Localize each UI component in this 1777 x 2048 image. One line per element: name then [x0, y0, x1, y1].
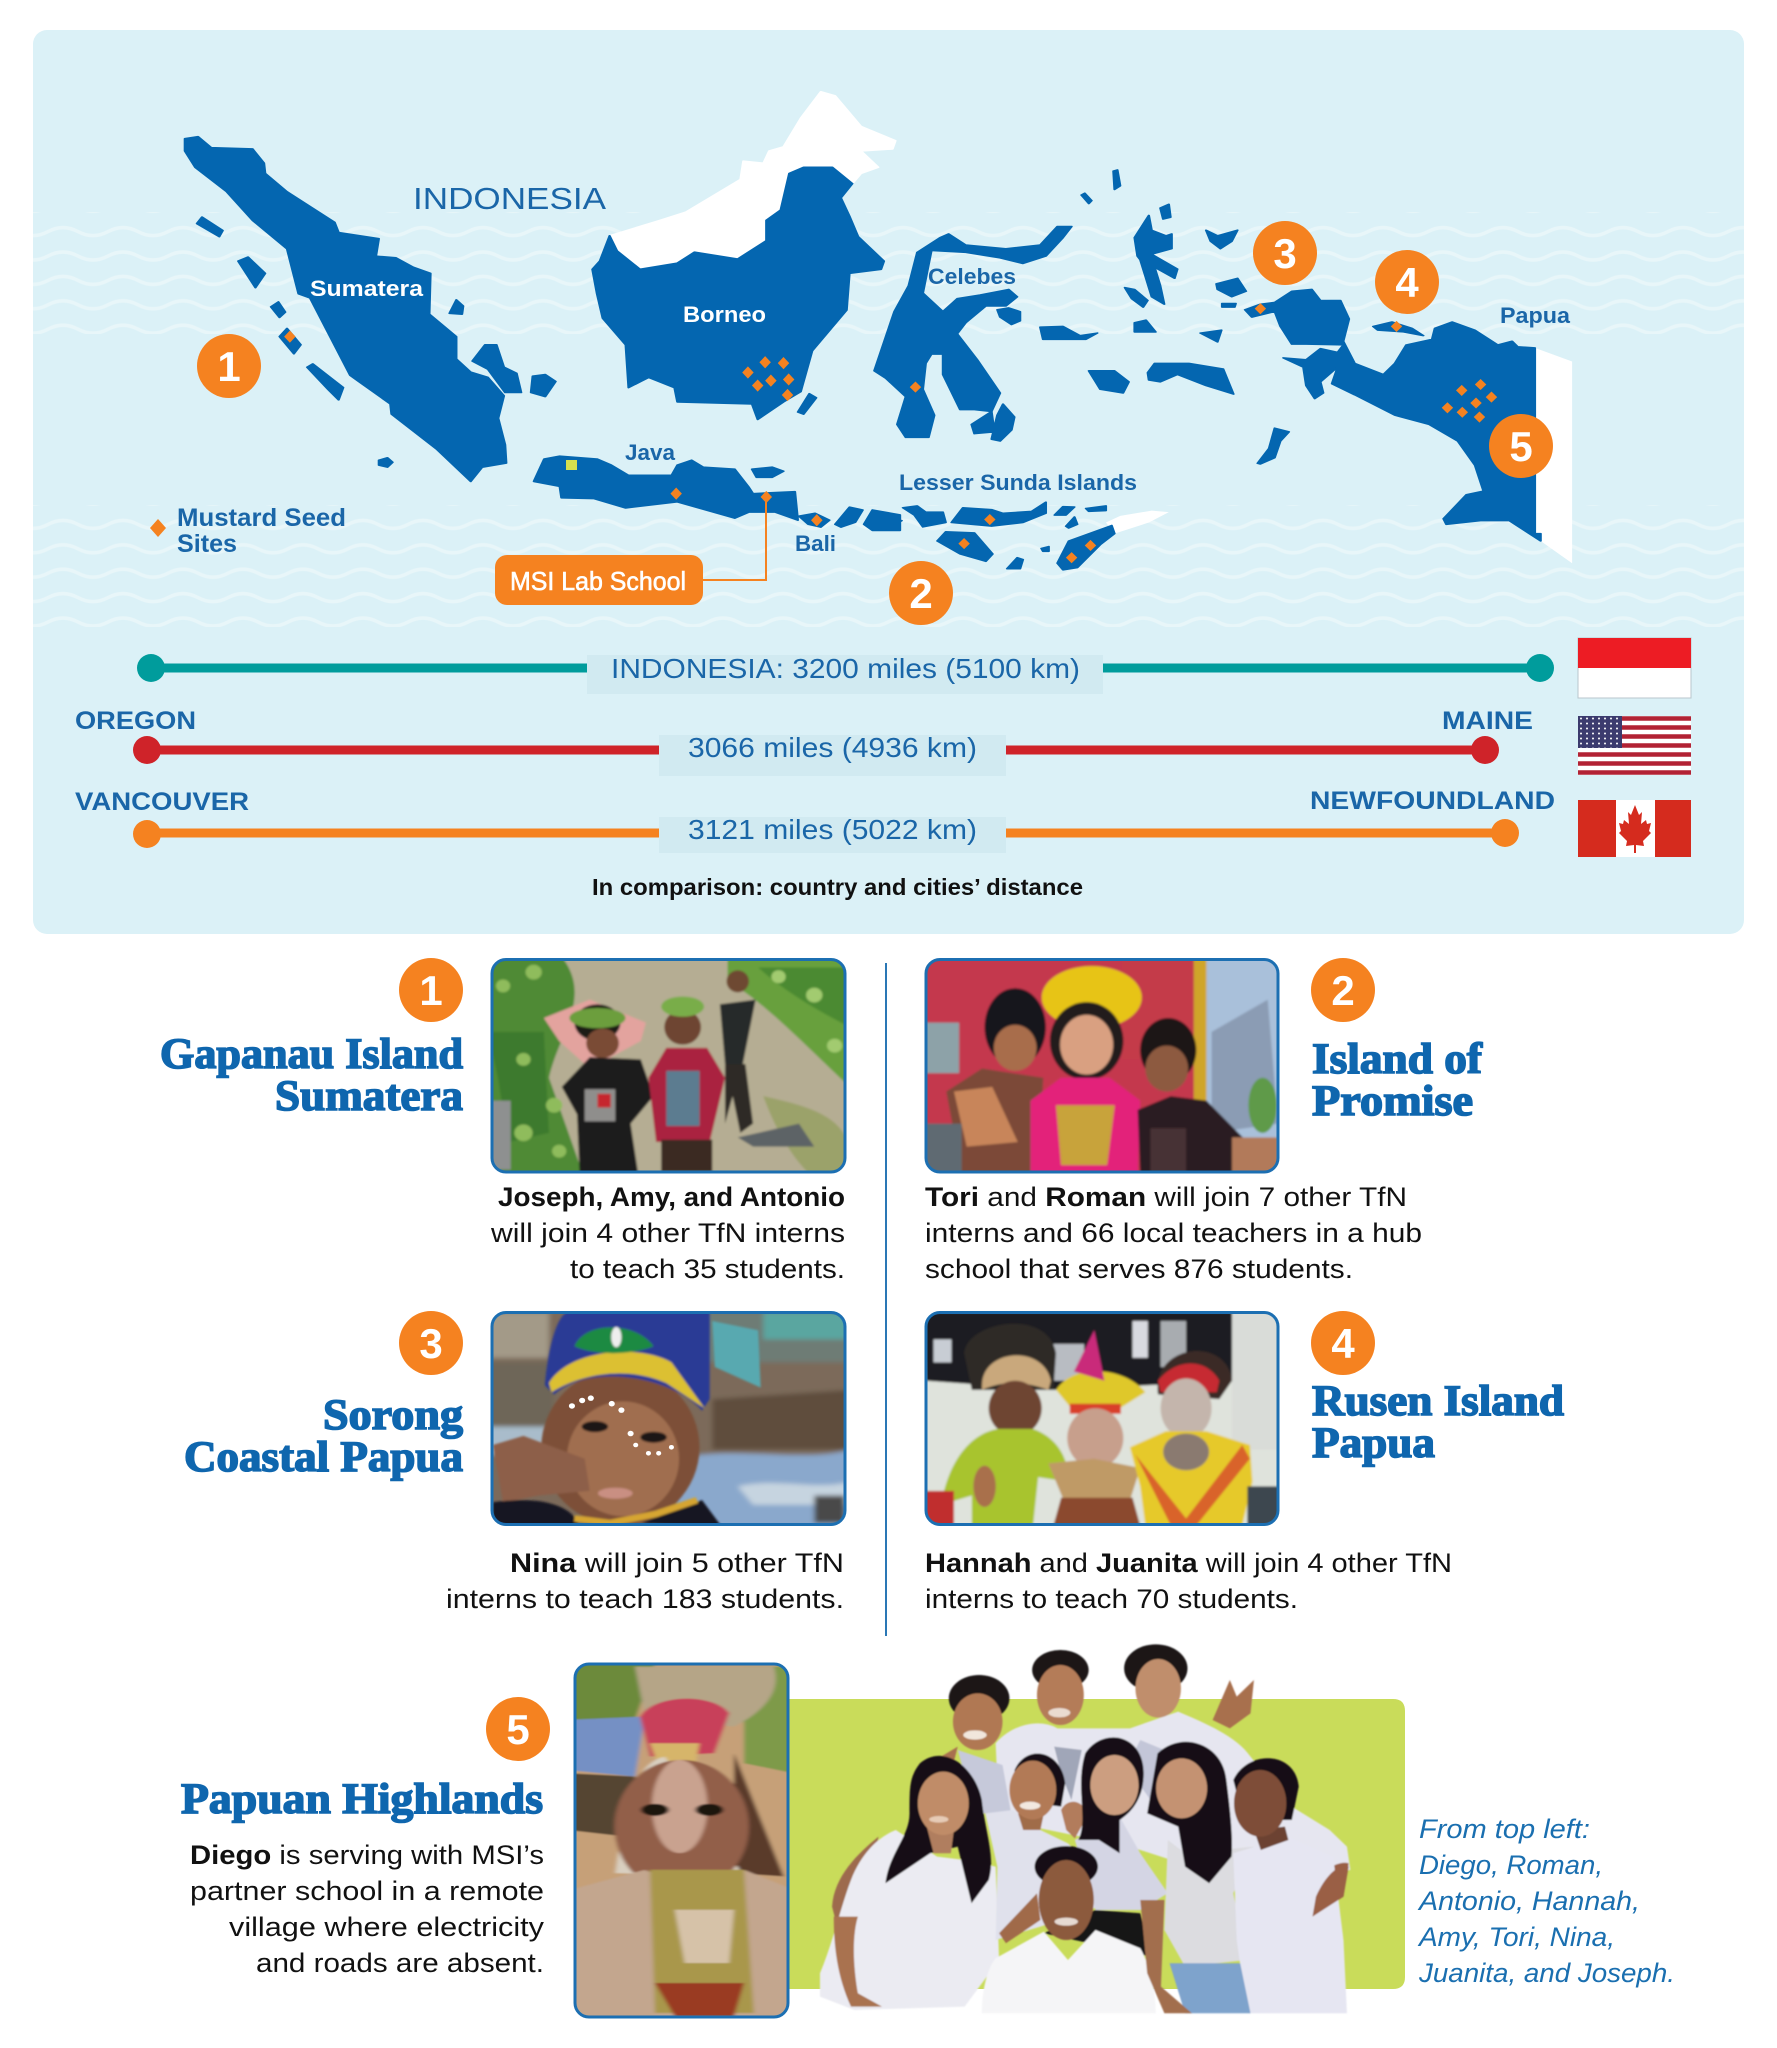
distance bar: Vancouver to Newfoundland [75, 787, 1555, 853]
flag: United States [1578, 716, 1691, 775]
map number badges: 1 [217, 343, 241, 390]
section 5: Papuan Highlands [181, 1644, 1675, 2020]
heading: Papuan Highlands: Papuan Highlands [181, 1776, 543, 1823]
map number badges [197, 221, 1553, 625]
distance bar: Indonesia [137, 653, 1554, 694]
icon: yellow square marker on Java [566, 460, 577, 470]
heading: Rusen Island Papua: Rusen Island [1312, 1378, 1564, 1425]
hand on shoulder [1312, 1866, 1349, 1917]
distance bar: Oregon to Maine: MAINE [1442, 707, 1533, 735]
text: section 4 interns: interns to teach 70 students. [925, 1584, 1298, 1614]
forearms [834, 1917, 882, 2007]
distance bar: Indonesia: INDONESIA: 3200 miles (5100 km) [611, 653, 1080, 684]
map labels: Sumatera [310, 276, 424, 301]
map labels [310, 264, 1571, 556]
long hair [885, 1756, 991, 1903]
distance bar: Vancouver to Newfoundland: NEWFOUNDLAND [1310, 787, 1555, 815]
wave pattern upper band [33, 212, 1744, 334]
text: Diego: and roads are absent. [256, 1948, 544, 1978]
distance bar: Vancouver to Newfoundland: VANCOUVER [75, 788, 249, 816]
section 4: Rusen Island Papua [923, 1307, 1564, 1614]
text: section 3 interns [446, 1548, 844, 1614]
text: Diego: Diego is serving with MSI’s [190, 1840, 544, 1870]
caption: comparison note: In comparison: country and cities’ distance [592, 874, 1083, 900]
flag: Canada [1578, 800, 1691, 857]
text: section 3 interns: interns to teach 183 students. [446, 1584, 844, 1614]
badge 1 [399, 958, 463, 1022]
back row heads [949, 1675, 1009, 1722]
heading: Sorong Coastal Papua: Sorong [323, 1392, 464, 1439]
text: section 2 interns: interns and 66 local teachers in a hub [925, 1218, 1422, 1248]
photo: group of nine interns [820, 1644, 1350, 2013]
arms [913, 1747, 958, 1773]
text: section 2 interns: Tori and Roman will join 7 other TfN [925, 1182, 1407, 1212]
heading: Sorong Coastal Papua [184, 1392, 464, 1481]
map labels: Java [625, 440, 676, 465]
callout: MSI Lab School [495, 500, 766, 605]
badge 3 [399, 1311, 463, 1375]
distance bar: Oregon to Maine: OREGON [75, 707, 196, 735]
text: Diego [190, 1840, 545, 1978]
map labels: Celebes [928, 264, 1016, 289]
heading: Gapanau Island Sumatera [160, 1031, 463, 1120]
map labels: Papua [1500, 303, 1571, 328]
section 2: Island of Promise [923, 954, 1483, 1284]
photo: three children with leaf crowns [488, 954, 850, 1179]
heading: Island of Promise: Promise [1312, 1078, 1473, 1125]
photo: three children in Papuan costume [923, 1307, 1281, 1528]
front man [982, 1930, 1156, 2013]
heading: Rusen Island Papua [1312, 1378, 1564, 1467]
text: section 1 interns: will join 4 other TfN interns [490, 1218, 845, 1248]
heading: Island of Promise [1312, 1036, 1483, 1125]
caption: From top left: From top left: [1419, 1814, 1590, 1844]
heading: Gapanau Island Sumatera: Sumatera [275, 1073, 463, 1120]
text: section 1 interns: Joseph, Amy, and Antonio [498, 1182, 845, 1212]
badge 5 [486, 1697, 550, 1761]
heading: Rusen Island Papua: Papua [1312, 1420, 1435, 1467]
text: section 1 interns: to teach 35 students. [570, 1254, 845, 1284]
badge 4 [1311, 1311, 1375, 1375]
callout: MSI Lab School: MSI Lab School [510, 566, 686, 596]
caption: From top left [1417, 1814, 1675, 1988]
text: Diego: partner school in a remote [190, 1876, 544, 1906]
mid row faces [927, 1827, 954, 1853]
text: section 4 interns [925, 1548, 1452, 1614]
shirts back row [996, 1712, 1350, 1880]
photo: three girls in traditional dress [923, 954, 1281, 1179]
flag: Indonesia [1578, 638, 1691, 698]
heading: Sorong Coastal Papua: Coastal Papua [184, 1434, 463, 1481]
badge 4: 4 [1331, 1320, 1355, 1367]
map number badges: 4 [1395, 259, 1419, 306]
badge 2: 2 [1331, 967, 1355, 1014]
text: section 1 interns [490, 1182, 845, 1284]
text: section 4 interns: Hannah and Juanita will join 4 other TfN [925, 1548, 1452, 1578]
section 1: Gapanau Island Sumatera [160, 954, 850, 1284]
legend: Mustard Seed Sites [150, 504, 346, 558]
panel: map and distance comparison [33, 30, 1744, 934]
divider [885, 963, 887, 1636]
badge 3: 3 [419, 1320, 443, 1367]
heading: Island of Promise: Island of [1312, 1036, 1483, 1083]
map: eastern Indonesia (Celebes, Maluku, Lesser Sunda, Papua) [874, 170, 1572, 570]
badge 5: 5 [506, 1706, 530, 1753]
badge 1: 1 [419, 967, 443, 1014]
section 3: Sorong Coastal Papua [184, 1307, 850, 1614]
map labels: Lesser Sunda Islands [899, 470, 1137, 495]
legend: Mustard Seed Sites: Sites [177, 530, 237, 558]
distance bar: Oregon to Maine: 3066 miles (4936 km) [688, 732, 977, 763]
distance bar: Oregon to Maine [75, 707, 1533, 776]
map number badges: 2 [909, 570, 933, 617]
caption: From top left: Antonio, Hannah, [1417, 1886, 1640, 1916]
map number badges: 3 [1273, 230, 1297, 277]
map markers: Mustard Seed sites west [284, 330, 823, 526]
heading: Gapanau Island Sumatera: Gapanau Island [160, 1031, 463, 1078]
caption: From top left: Juanita, and Joseph. [1418, 1958, 1675, 1988]
map labels: Borneo [683, 302, 766, 327]
badge 2 [1311, 958, 1375, 1022]
distance bar: Vancouver to Newfoundland: 3121 miles (5022 km) [688, 814, 977, 845]
panel: green backdrop [789, 1699, 1405, 1989]
text: section 2 interns: school that serves 876 students. [925, 1254, 1353, 1284]
shirts front [820, 1830, 999, 2010]
wave pattern lower band [33, 505, 1744, 627]
text: Diego: village where electricity [229, 1912, 545, 1942]
map markers: Mustard Seed sites east [910, 303, 1497, 563]
caption: From top left: Amy, Tori, Nina, [1417, 1922, 1615, 1952]
heading: INDONESIA: INDONESIA [413, 181, 606, 216]
map labels: Bali [795, 531, 836, 556]
map number badges: 5 [1509, 423, 1533, 470]
text: section 2 interns [925, 1182, 1422, 1284]
photo: Diego's student [566, 1662, 794, 2020]
caption: From top left: Diego, Roman, [1419, 1850, 1603, 1880]
photo: girl with blue headdress [488, 1307, 850, 1532]
text: section 3 interns: Nina will join 5 other TfN [510, 1548, 844, 1578]
map: western Indonesia (Sumatera, Borneo, Java) [185, 92, 900, 530]
legend: Mustard Seed Sites: Mustard Seed [177, 504, 346, 532]
